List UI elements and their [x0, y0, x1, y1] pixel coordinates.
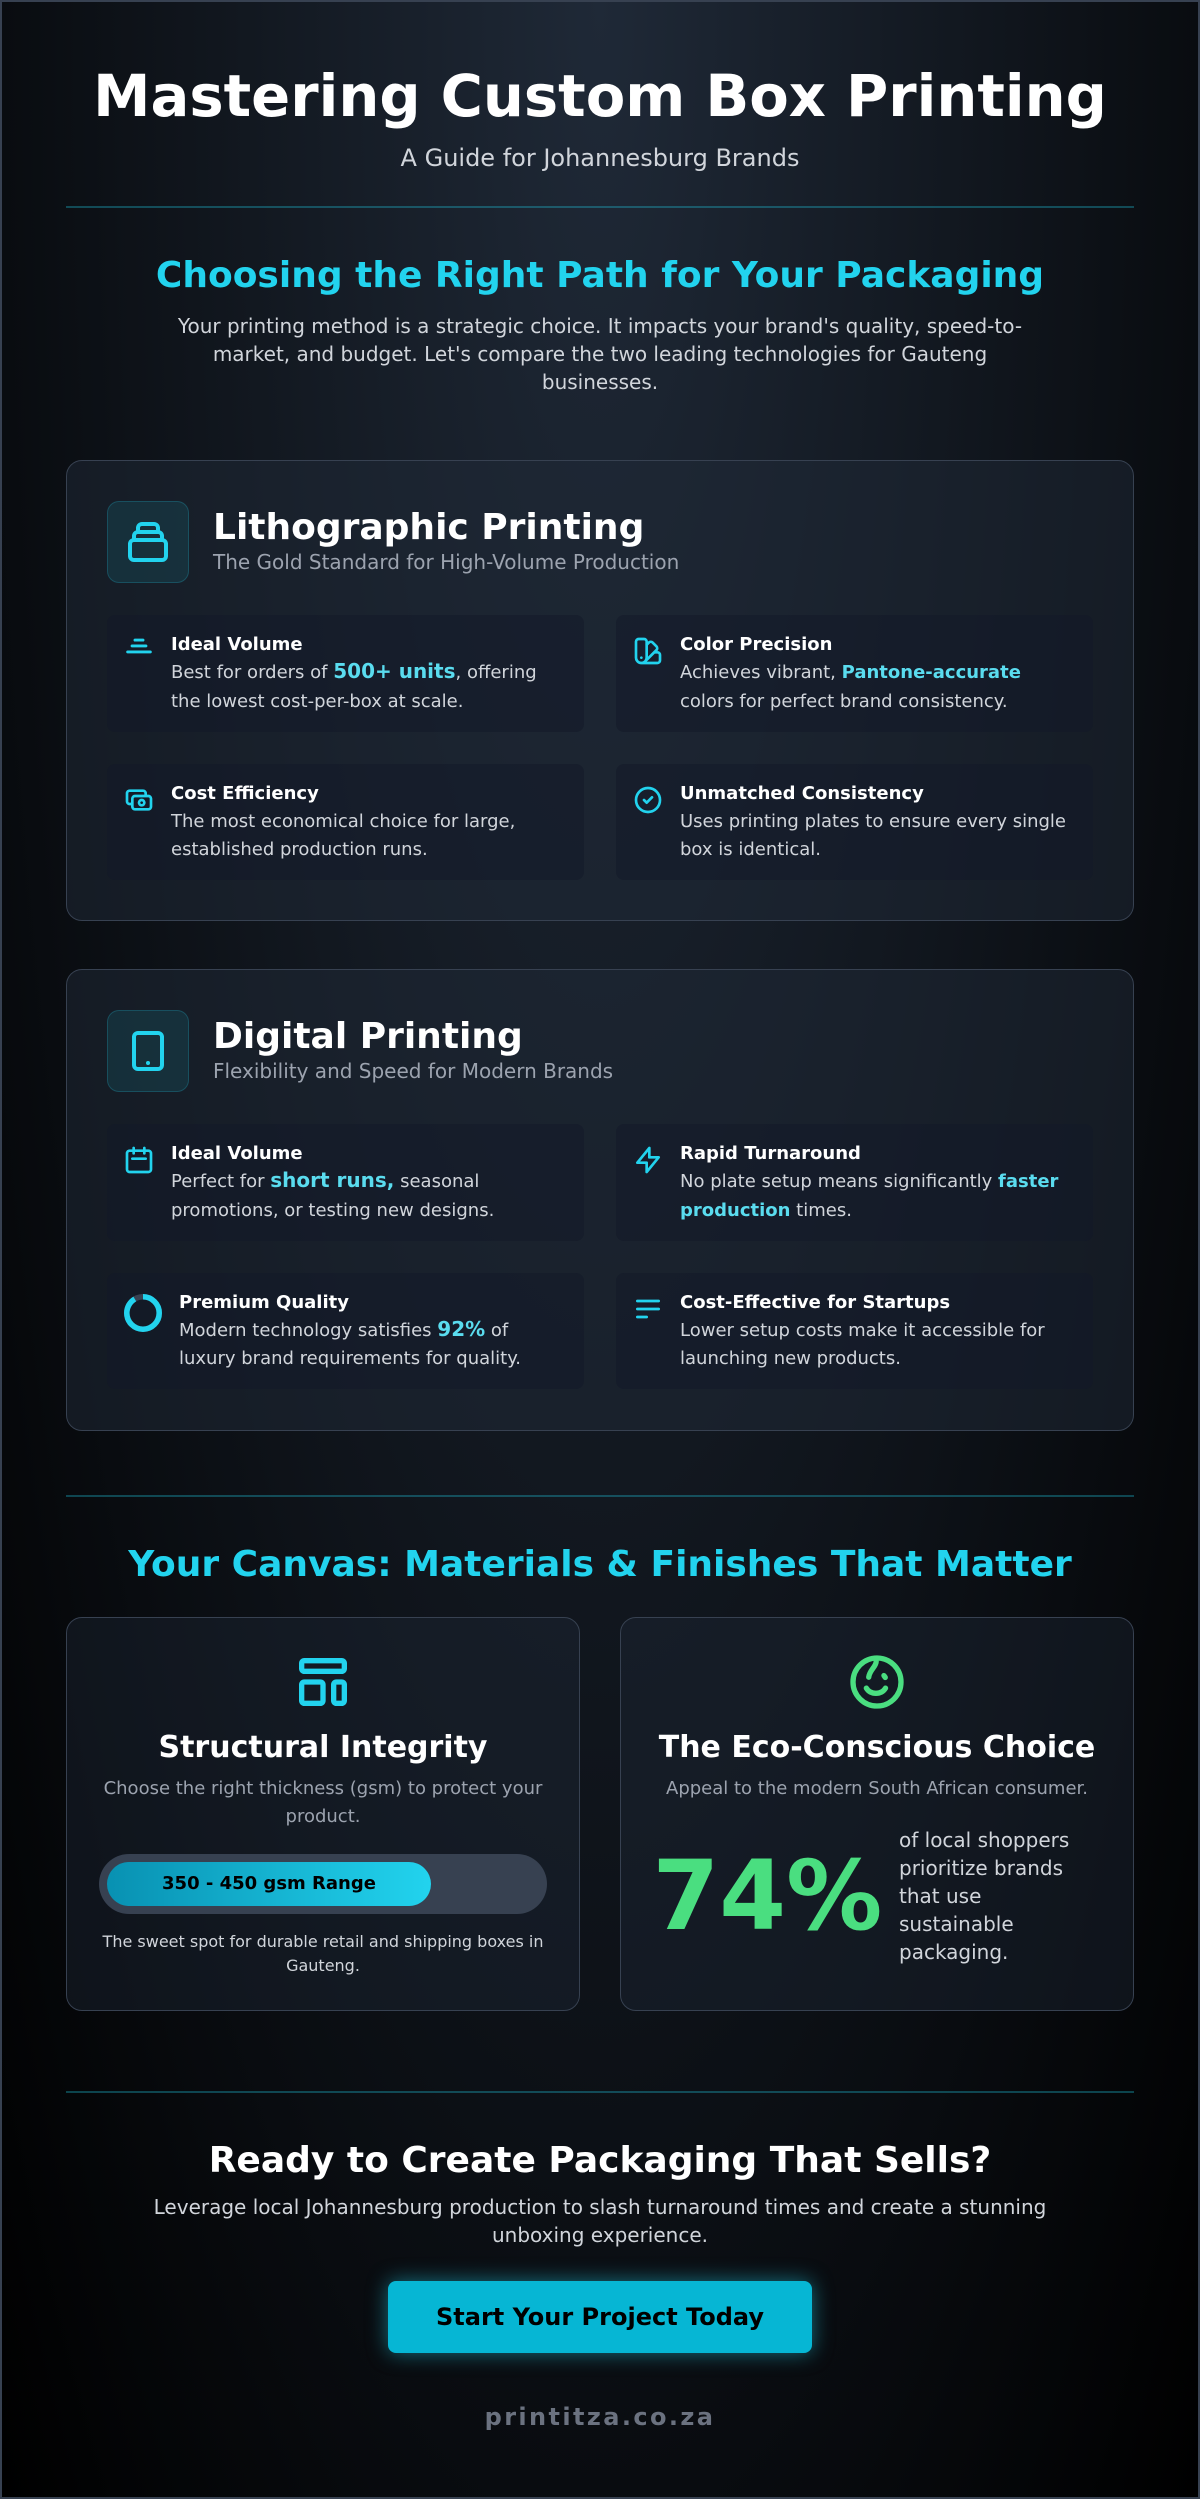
text: sweet spot caption [102, 1932, 543, 1975]
section heading: materials and finishes: Your Canvas: Materials & Finishes That Matter [128, 1544, 1072, 1585]
intro text [178, 314, 1022, 394]
feature: unmatched consistency: Unmatched Consistency [680, 783, 924, 804]
feature: rapid turnaround: production times. [680, 1200, 852, 1221]
feature: cost-effective for startups: Cost-Effective for Startups [680, 1292, 950, 1313]
feature: cost efficiency: Cost Efficiency [171, 783, 319, 804]
subheading: digital: Flexibility and Speed for Modern Brands [213, 1059, 613, 1083]
feature: unmatched consistency [616, 764, 1093, 880]
feature: cost efficiency [107, 764, 584, 880]
text: stat description: sustainable [899, 1912, 1014, 1936]
feature: cost-effective for startups: launching new products. [680, 1348, 901, 1369]
panel: structural integrity [66, 1617, 580, 2011]
heading: digital printing: Digital Printing [213, 1016, 523, 1056]
icon: lithographic collection [107, 501, 189, 583]
feature: rapid turnaround: Rapid Turnaround [680, 1143, 861, 1164]
subtitle: A Guide for Johannesburg Brands [401, 144, 799, 172]
feature: ideal volume (digital): promotions, or testing new designs. [171, 1200, 494, 1221]
panel: lithographic printing [66, 460, 1134, 921]
feature: unmatched consistency: Uses printing plates to ensure every single [680, 811, 1066, 832]
text: stat description: prioritize brands [899, 1856, 1063, 1880]
text: sweet spot caption: Gauteng. [286, 1956, 360, 1975]
feature: cost-effective for startups [616, 1272, 1093, 1389]
feature: premium quality with 92% donut: Modern technology satisfies 92% of [179, 1317, 508, 1341]
feature: premium quality with 92% donut [107, 1272, 584, 1389]
section heading: choosing the right path: Choosing the Right Path for Your Packaging [156, 254, 1044, 296]
heading: lithographic printing: Lithographic Printing [213, 506, 644, 548]
panel: digital printing [66, 969, 1134, 1431]
feature: ideal volume (digital) [107, 1124, 584, 1240]
button: start your project [388, 2281, 812, 2353]
footer: website: printitza.co.za [485, 2403, 715, 2431]
text: stat description [899, 1828, 1069, 1964]
feature: color precision: colors for perfect brand consistency. [680, 691, 1008, 712]
feature: ideal volume (digital): Ideal Volume [171, 1143, 303, 1164]
text: gsm description: product. [286, 1806, 360, 1827]
feature: ideal volume (digital): Perfect for short runs, seasonal [171, 1168, 479, 1192]
panel: eco-conscious choice [620, 1617, 1134, 2011]
feature: ideal volume (litho): the lowest cost-per-box at scale. [171, 691, 463, 712]
button: start your project: Start Your Project Today [436, 2303, 764, 2331]
subheading: lithographic: The Gold Standard for High-Volume Production [213, 550, 679, 574]
feature: color precision [616, 615, 1093, 732]
stat: 74%: 74% [652, 1840, 882, 1952]
feature: color precision: Color Precision [680, 634, 832, 655]
feature: color precision: Achieves vibrant, Pantone-accurate [680, 662, 1021, 683]
call to action text: Leverage local Johannesburg production to slash turnaround times and create a stunning [154, 2194, 1046, 2218]
text: eco description: Appeal to the modern South African consumer. [666, 1778, 1088, 1799]
text: gsm description [104, 1778, 542, 1827]
title: Mastering Custom Box Printing [93, 63, 1107, 130]
feature: premium quality with 92% donut: luxury brand requirements for quality. [179, 1348, 521, 1369]
intro text: Your printing method is a strategic choice. It impacts your brand's quality, speed-to- [178, 314, 1022, 338]
heading: eco-conscious choice: The Eco-Conscious Choice [659, 1730, 1095, 1765]
intro text: market, and budget. Let's compare the two leading technologies for Gauteng [213, 342, 987, 366]
call to action text: unboxing experience. [492, 2222, 708, 2246]
feature: ideal volume (litho): Best for orders of 500+ units, offering [171, 659, 537, 683]
intro text: businesses. [542, 370, 658, 394]
bar: gsm range [99, 1854, 547, 1914]
text: stat description: packaging. [899, 1940, 1008, 1964]
call to action text [154, 2194, 1046, 2246]
feature: cost-effective for startups: Lower setup costs make it accessible for [680, 1320, 1045, 1341]
icon: structural template [299, 1658, 347, 1706]
feature: cost efficiency: established production runs. [171, 839, 428, 860]
bar fill: 350-450 gsm range [107, 1862, 431, 1906]
feature: unmatched consistency: box is identical. [680, 839, 821, 860]
heading: structural integrity: Structural Integrity [158, 1730, 488, 1765]
text: sweet spot caption: The sweet spot for durable retail and shipping boxes in [103, 1932, 543, 1951]
feature: premium quality with 92% donut: Premium Quality [179, 1292, 349, 1313]
feature: cost efficiency: The most economical choice for large, [171, 811, 515, 832]
feature: ideal volume (litho): Ideal Volume [171, 634, 303, 655]
icon: digital tablet [107, 1010, 189, 1092]
icon: eco face [850, 1655, 904, 1709]
text: gsm description: Choose the right thickness (gsm) to protect your [104, 1778, 542, 1799]
feature: ideal volume (litho) [107, 615, 584, 732]
feature: rapid turnaround [616, 1124, 1093, 1240]
feature: rapid turnaround: No plate setup means significantly faster [680, 1171, 1058, 1192]
call to action heading: Ready to Create Packaging That Sells? [209, 2140, 991, 2181]
text: stat description: that use [899, 1884, 981, 1908]
bar fill: 350-450 gsm range: 350 - 450 gsm Range [162, 1873, 376, 1894]
text: stat description: of local shoppers [899, 1828, 1069, 1852]
